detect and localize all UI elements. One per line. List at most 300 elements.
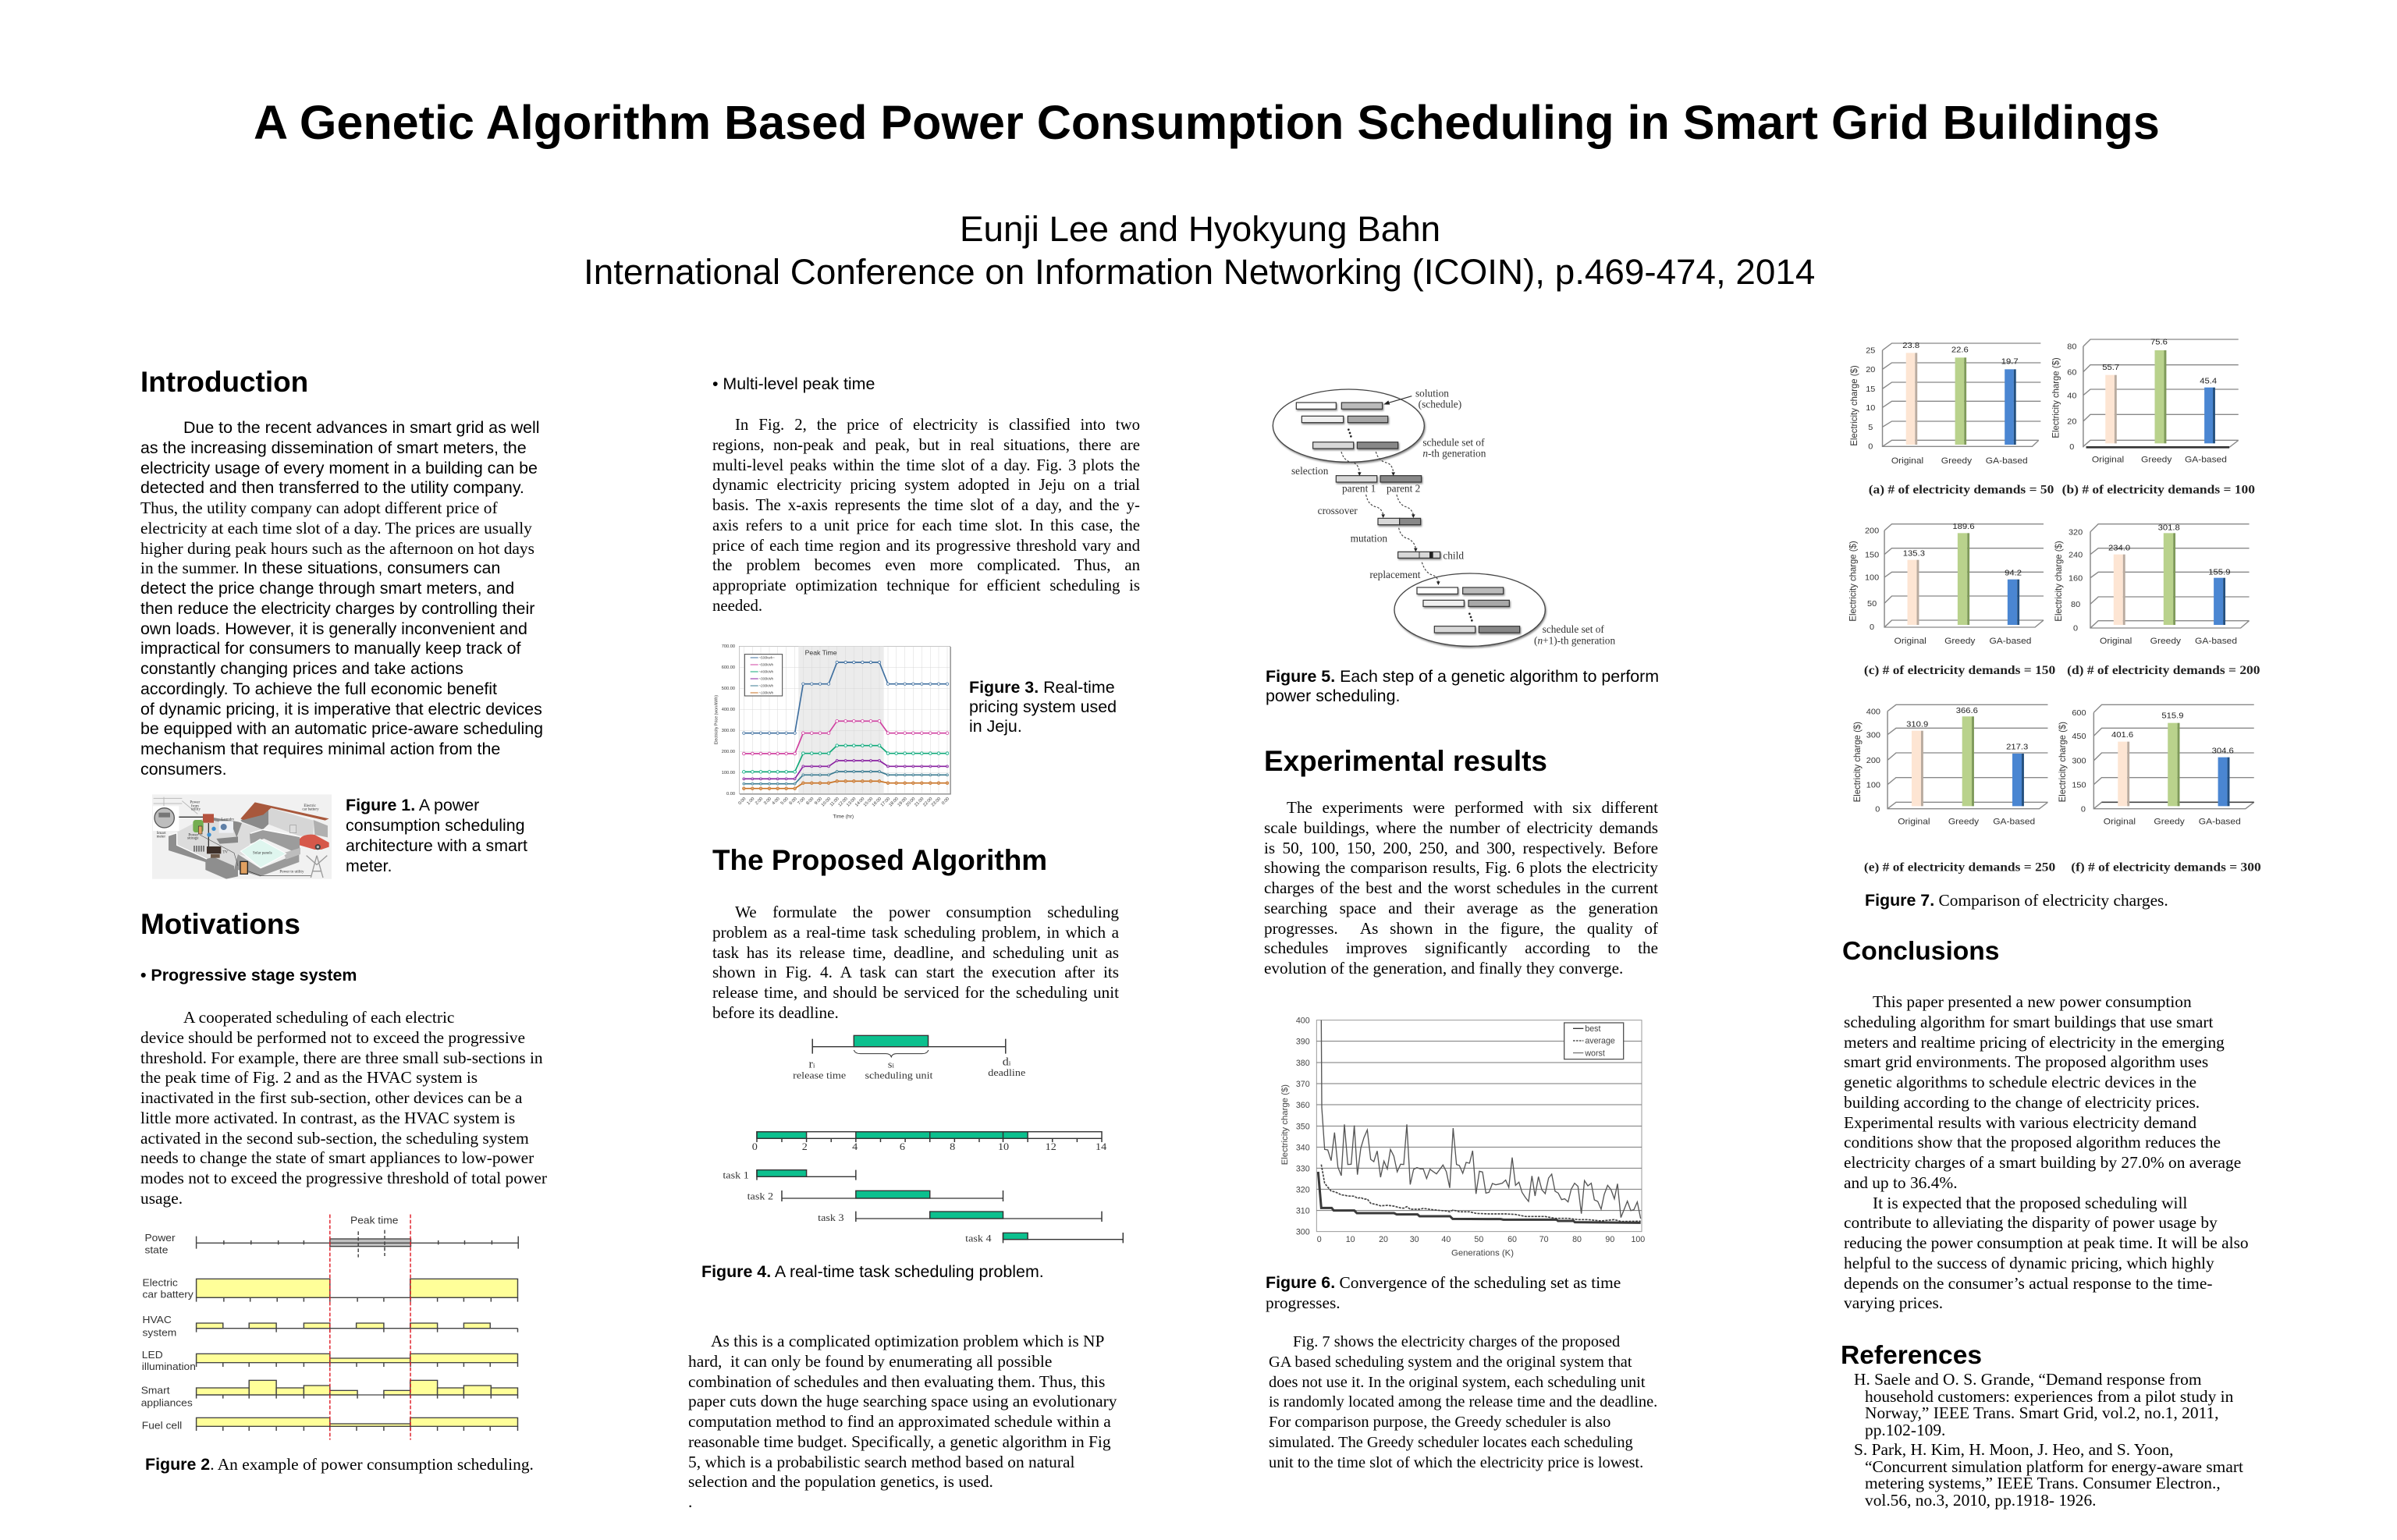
figure 3: real-time pricing line chart: 7:00	[797, 797, 806, 806]
figure 6: convergence line chart: 40	[1441, 1235, 1451, 1244]
figure 6: convergence line chart: 70	[1539, 1235, 1549, 1244]
text block: experimental results: schedules improves significantly according to the	[1264, 939, 1658, 957]
figure 3: real-time pricing line chart: ~100kWh	[759, 691, 774, 695]
bar chart f: 150	[2072, 782, 2086, 790]
text block: introduction: in the summer. In these situations, consumers can	[140, 559, 500, 577]
figure 4: real-time task scheduling diagram: ri	[809, 1058, 815, 1070]
bar chart c: 135.3	[1903, 549, 1925, 558]
figure 1: smart meter architecture illustration: Solar panels	[253, 851, 272, 855]
reference 2: S. Park, H. Kim, H. Moon, J. Heo, and S. Yoon,	[1854, 1440, 2173, 1459]
figure 3: real-time pricing line chart: 15:00	[863, 797, 874, 807]
figure 3: real-time pricing line chart: 400.00	[722, 708, 735, 712]
bar chart f: 304.6	[2212, 747, 2234, 756]
figure 3: real-time pricing line chart: 23:00	[931, 797, 942, 807]
figure 3: real-time pricing line chart	[714, 644, 951, 820]
figure 3: real-time pricing line chart: 11:00	[829, 797, 840, 807]
figure 3: real-time pricing line chart: 14:00	[854, 797, 865, 807]
figure 4: real-time task scheduling diagram: task 4	[965, 1233, 992, 1244]
figure 6: convergence line chart	[1280, 1017, 1645, 1258]
figure 4: real-time task scheduling diagram: task 3	[818, 1212, 844, 1223]
bar chart b: 55.7	[2102, 363, 2119, 372]
figure 2: power consumption schedule chart: state	[144, 1244, 168, 1256]
figure 5: genetic algorithm steps diagram: parent 1	[1342, 483, 1376, 495]
text block: figure 7 explanation: does not use it. In the original system, each scheduling unit	[1269, 1373, 1645, 1390]
figure 6: convergence line chart: 390	[1296, 1038, 1310, 1047]
caption: figure 6: progresses.	[1266, 1293, 1341, 1312]
figure 6: convergence line chart: Generations (K)	[1451, 1249, 1514, 1258]
figure 6: convergence line chart: 80	[1572, 1235, 1582, 1244]
bar chart f: 300	[2072, 758, 2086, 766]
figure 7: electricity charge bar charts	[1847, 338, 2261, 874]
figure 3: real-time pricing line chart: 17:00	[880, 797, 891, 807]
figure 4: real-time task scheduling diagram: 12	[1046, 1141, 1056, 1152]
text block: experimental results: progresses. As shown in the figure, the quality of	[1264, 919, 1658, 938]
bar chart d: Original	[2100, 637, 2132, 646]
bar chart e: 0	[1875, 806, 1880, 814]
text block: experimental results: The experiments were performed with six different	[1287, 798, 1658, 817]
text block: conclusions: and up to 36.4%.	[1844, 1173, 1958, 1192]
figure 2: power consumption schedule chart: illumination	[142, 1361, 196, 1372]
figure 5: genetic algorithm steps diagram: (n+1)-th generation	[1534, 635, 1615, 647]
bar chart c: GA-based	[1989, 637, 2031, 646]
text block: genetic algorithm explanation: hard, it can only be found by enumerating all possible	[688, 1352, 1052, 1371]
figure 6: convergence line chart: 330	[1296, 1164, 1310, 1173]
figure 1: smart meter architecture illustration: utility	[191, 808, 201, 812]
bar chart b: Greedy	[2141, 456, 2172, 464]
caption: figure 4: Figure 4. A real-time task scheduling problem.	[701, 1262, 1044, 1281]
bar chart a: Greedy	[1941, 456, 1972, 466]
bar chart b	[2050, 338, 2255, 496]
figure 4: real-time task scheduling diagram	[723, 1034, 1124, 1244]
text block: proposed algorithm: release time, and should be serviced for the scheduling unit	[712, 983, 1119, 1002]
bar chart b: (b) # of electricity demands = 100	[2062, 482, 2255, 496]
bar chart d: 240	[2069, 552, 2083, 559]
bar chart e: 400	[1866, 708, 1880, 716]
figure 6: convergence line chart: 360	[1296, 1101, 1310, 1110]
figure 6: convergence line chart: 380	[1296, 1059, 1310, 1068]
figure 1: smart meter architecture illustration: Laundry	[221, 818, 235, 822]
figure 3: real-time pricing line chart: 22:00	[922, 797, 933, 807]
bar chart c: Original	[1894, 637, 1926, 646]
figure 3: real-time pricing line chart: ~200kWh	[759, 684, 774, 688]
text block: genetic algorithm explanation: As this is a complicated optimization problem which is NP	[711, 1332, 1104, 1350]
figure 3: real-time pricing line chart: Peak Time	[805, 648, 837, 656]
text block: motivations: little more activated. In contrast, as the HVAC system is	[140, 1109, 515, 1127]
bar chart c: Greedy	[1944, 637, 1976, 646]
text block: experimental results: is 50, 100, 150, 200, 250, and 300, respectively. Before	[1264, 838, 1658, 857]
text block: multi-level peak time: basis. The x-axis represents the time slot of a day, and the y-	[712, 496, 1140, 514]
figure 2: power consumption schedule chart: Electric	[143, 1277, 178, 1288]
bar chart a	[1848, 341, 2054, 496]
text block: conclusions: building according to the change of electricity prices.	[1844, 1093, 2200, 1112]
text block: conclusions: varying prices.	[1844, 1293, 1943, 1312]
bar chart c: 0	[1870, 623, 1874, 632]
text block: conclusions: reducing the power consumption at peak time. It will be also	[1844, 1233, 2249, 1252]
text block: conclusions: helpful to the success of dynamic pricing, which highly	[1844, 1254, 2214, 1272]
bar chart f: 600	[2072, 709, 2086, 718]
text block: experimental results: evolution of the generation, and finally they converge.	[1264, 959, 1623, 978]
bar chart c: Electricity charge ($)	[1847, 541, 1859, 622]
caption: figure 3: in Jeju.	[969, 717, 1022, 736]
bar chart f: 450	[2072, 733, 2086, 741]
bar chart a: 19.7	[2001, 357, 2019, 367]
figure 5: genetic algorithm steps diagram: crossover	[1318, 505, 1358, 516]
text block: multi-level peak time: regions, non-peak and peak, but in real situations, there are	[712, 436, 1140, 454]
bar chart e: Greedy	[1948, 818, 1979, 826]
figure 5: genetic algorithm steps diagram: schedule set of	[1543, 623, 1604, 635]
figure 4: real-time task scheduling diagram: 4	[852, 1141, 858, 1152]
bar chart b: 45.4	[2200, 377, 2217, 385]
figure 2: power consumption schedule chart: system	[143, 1327, 176, 1339]
figure 6: convergence line chart: 350	[1296, 1122, 1310, 1131]
bar chart e: Original	[1898, 818, 1930, 826]
bar chart a: 20	[1866, 366, 1876, 374]
bar chart a: Electricity charge ($)	[1848, 365, 1859, 446]
text block: genetic algorithm explanation: .	[688, 1492, 692, 1511]
bar chart b: 20	[2067, 418, 2077, 427]
text block: motivations: A cooperated scheduling of each electric	[183, 1008, 454, 1027]
caption: figure 7: Figure 7. Comparison of electricity charges.	[1865, 891, 2168, 910]
figure 4: real-time task scheduling diagram: 2	[802, 1141, 808, 1152]
figure 5: genetic algorithm steps diagram: replacement	[1369, 569, 1421, 580]
figure 6: convergence line chart: 10	[1346, 1235, 1355, 1244]
text block: experimental results: scale buildings, where the number of electricity demands	[1264, 818, 1658, 837]
caption: figure 6: Figure 6. Convergence of the scheduling set as time	[1266, 1273, 1621, 1292]
subheading: multi-level peak time: • Multi-level peak time	[712, 374, 875, 393]
text block: introduction: mechanism that requires minimal action from the	[140, 740, 500, 758]
reference 1: H. Saele and O. S. Grande, “Demand response from	[1854, 1370, 2202, 1389]
text block: introduction: electricity at each time slot of a day. The prices are usually	[140, 519, 532, 538]
bar chart a: 10	[1866, 404, 1876, 413]
reference 2	[1854, 1440, 2243, 1509]
figure 1: smart meter architecture illustration: Smart	[157, 832, 166, 836]
bar chart f: Original	[2104, 818, 2136, 826]
text block: genetic algorithm explanation: computation method to find an approximated schedule within a	[688, 1412, 1111, 1431]
caption: figure 1	[346, 796, 527, 875]
bar chart c	[1847, 522, 2055, 677]
figure 2: power consumption schedule chart	[141, 1214, 519, 1440]
text block: introduction: be equipped with an automatic price-aware scheduling	[140, 719, 543, 738]
bar chart e: 300	[1866, 732, 1880, 740]
figure 3: real-time pricing line chart: 0:00	[737, 797, 747, 806]
reference 1: pp.102-109.	[1865, 1420, 1945, 1439]
text block: genetic algorithm explanation: combination of schedules and then evaluating them. Thus, this	[688, 1371, 1105, 1390]
text block: multi-level peak time: In Fig. 2, the price of electricity is classified into two	[735, 416, 1140, 434]
bar chart a: 0	[1868, 443, 1873, 451]
text block: figure 7 explanation	[1269, 1333, 1657, 1471]
bar chart b: Electricity charge ($)	[2050, 357, 2061, 438]
caption: figure 1: consumption scheduling	[346, 816, 525, 835]
figure 5: genetic algorithm steps diagram: (schedule)	[1419, 399, 1461, 410]
bar chart f: (f) # of electricity demands = 300	[2071, 860, 2261, 874]
figure 3: real-time pricing line chart: 20:00	[905, 797, 916, 807]
bar chart d: 320	[2069, 529, 2083, 537]
text block: conclusions: electricity charges of a smart building by 27.0% on average	[1844, 1153, 2241, 1172]
bar chart b: GA-based	[2185, 456, 2227, 464]
text block: introduction: Due to the recent advances in smart grid as well	[183, 418, 540, 437]
text block: multi-level peak time: axis refers to a unit price for each time slot. In this case, the	[712, 516, 1140, 534]
text block: introduction: of dynamic pricing, it is imperative that electric devices	[140, 699, 542, 718]
caption: figure 6	[1266, 1273, 1621, 1312]
figure 6: convergence line chart: 300	[1296, 1228, 1310, 1237]
text block: genetic algorithm explanation: selection and the population genetics, is used.	[688, 1472, 993, 1491]
figure 5: genetic algorithm steps diagram	[1272, 387, 1615, 649]
bar chart f: 0	[2081, 806, 2086, 814]
text block: introduction: own loads. However, it is generally inconvenient and	[140, 619, 527, 638]
figure 6: convergence line chart: 400	[1296, 1017, 1310, 1026]
bar chart d: (d) # of electricity demands = 200	[2067, 663, 2260, 677]
figure 1: smart meter architecture illustration	[152, 794, 332, 879]
caption: figure 1: Figure 1. A power	[346, 796, 479, 814]
bar chart d	[2052, 523, 2260, 677]
figure 4: real-time task scheduling diagram: 14	[1096, 1141, 1106, 1152]
bar chart a: (a) # of electricity demands = 50	[1869, 482, 2054, 496]
bar chart a: Original	[1891, 456, 1923, 466]
figure 3: real-time pricing line chart: 21:00	[914, 797, 925, 807]
figure 4: real-time task scheduling diagram: release time	[793, 1070, 846, 1080]
bar chart f	[2057, 704, 2261, 874]
figure 1: smart meter architecture illustration: Power to utility	[279, 871, 304, 875]
caption: figure 5: Figure 5. Each step of a genetic algorithm to perform	[1266, 667, 1659, 686]
figure 5: genetic algorithm steps diagram: mutation	[1351, 532, 1387, 544]
text block: multi-level peak time	[712, 416, 1140, 615]
bar chart a: 22.6	[1951, 346, 1969, 354]
caption: figure 3: Figure 3. Real-time	[969, 678, 1115, 697]
text: Electricity Price (won/kWh)	[714, 695, 719, 744]
figure 2: power consumption schedule chart: Smart	[141, 1385, 170, 1396]
text block: conclusions: smart grid environments. The proposed algorithm uses	[1844, 1052, 2208, 1071]
figure 5: genetic algorithm steps diagram: selection	[1291, 465, 1329, 477]
figure 3: real-time pricing line chart: 8:00	[805, 797, 815, 806]
reference 2: vol.56, no.3, 2010, pp.1918- 1926.	[1865, 1490, 2096, 1509]
figure 3: real-time pricing line chart: 18:00	[888, 797, 900, 807]
bar chart b: Original	[2092, 456, 2124, 464]
text block: proposed algorithm: problem as a real-time task scheduling problem, in which a	[712, 923, 1119, 942]
figure 6: convergence line chart: 100	[1631, 1235, 1645, 1244]
text block: introduction: electricity usage of every moment in a building can be	[140, 459, 538, 477]
figure 4: real-time task scheduling diagram: si	[888, 1059, 895, 1070]
figure 3: real-time pricing line chart: 4:00	[772, 797, 781, 806]
figure 3: real-time pricing line chart: 0.00	[726, 792, 735, 797]
bar chart c: 150	[1865, 552, 1879, 559]
bar chart b: 40	[2067, 392, 2077, 400]
figure 3: real-time pricing line chart: 2:00	[755, 797, 764, 806]
figure 3: real-time pricing line chart: 1:00	[746, 797, 755, 806]
bar chart e: 217.3	[2006, 743, 2028, 752]
figure 6: convergence line chart: 310	[1296, 1207, 1310, 1216]
figure 1: smart meter architecture illustration: Electric	[304, 804, 317, 808]
text block: conclusions: It is expected that the proposed scheduling will	[1873, 1194, 2187, 1212]
figure 5: genetic algorithm steps diagram: parent 2	[1387, 483, 1420, 495]
figure 3: real-time pricing line chart: 10:00	[821, 797, 832, 807]
bar chart e: 366.6	[1956, 706, 1978, 715]
text block: conclusions: This paper presented a new power consumption	[1873, 992, 2192, 1011]
text block: figure 7 explanation: unit to the time slot of which the electricity price is lowest.	[1269, 1454, 1643, 1471]
bar chart e: (e) # of electricity demands = 250	[1864, 860, 2055, 874]
figure 6: convergence line chart: Electricity charge ($)	[1280, 1084, 1290, 1165]
bar chart c: 200	[1865, 527, 1879, 536]
bar chart a: 25	[1866, 347, 1876, 356]
figure 1: smart meter architecture illustration: meter	[157, 836, 165, 839]
text block: multi-level peak time: needed.	[712, 597, 762, 615]
reference 2: “Concurrent simulation platform for energy-aware smart	[1865, 1457, 2243, 1476]
figure 3: real-time pricing line chart: ~400kWh	[759, 670, 774, 674]
bar chart d: 80	[2071, 601, 2080, 609]
text block: introduction: then reduce the electricity charges by controlling their	[140, 599, 534, 618]
figure 1: smart meter architecture illustration: TV	[222, 850, 228, 854]
conference reference: International Conference on Information Networking (ICOIN), p.469-474, 2014	[584, 252, 1815, 292]
text block: introduction: detected and then transferred to the utility company.	[140, 478, 524, 497]
figure 4: real-time task scheduling diagram: task 1	[723, 1169, 749, 1181]
bar chart d: Greedy	[2150, 637, 2181, 646]
text block: conclusions: Experimental results with various electricity demand	[1844, 1112, 2196, 1131]
bar chart e: 310.9	[1906, 720, 1928, 729]
figure 6: convergence line chart: 320	[1296, 1185, 1310, 1194]
text block: genetic algorithm explanation: 5, which is a probabilistic search method based on natural	[688, 1453, 1074, 1471]
figure 3: real-time pricing line chart: 9:00	[814, 797, 823, 806]
text block: conclusions: depends on the consumer’s actual response to the time-	[1844, 1273, 2212, 1292]
bar chart d: 301.8	[2158, 523, 2180, 533]
figure 3: real-time pricing line chart: ~500kWh	[759, 663, 774, 667]
bar chart f: Greedy	[2154, 818, 2185, 826]
figure 3: real-time pricing line chart: 700.00	[722, 644, 735, 649]
figure 4: real-time task scheduling diagram: 10	[998, 1141, 1009, 1152]
text block: introduction	[140, 418, 543, 779]
figure 2: power consumption schedule chart: appliances	[141, 1397, 193, 1408]
figure 3: real-time pricing line chart: 12:00	[837, 797, 849, 807]
caption: figure 5	[1266, 667, 1659, 705]
text block: figure 7 explanation: GA based scheduling system and the original system that	[1269, 1354, 1632, 1371]
bar chart f: 515.9	[2161, 711, 2184, 721]
subheading: progressive stage system: • Progressive stage system	[140, 966, 357, 985]
text block: motivations	[140, 1008, 547, 1208]
bar chart b: 60	[2067, 369, 2077, 377]
figure 3: real-time pricing line chart: 6:00	[789, 797, 798, 806]
figure 1: smart meter architecture illustration: car battery	[302, 807, 319, 811]
text block: motivations: the peak time of Fig. 2 and as the HVAC system is	[140, 1068, 478, 1087]
text block: proposed algorithm: We formulate the power consumption scheduling	[735, 903, 1119, 921]
text block: conclusions	[1844, 992, 2249, 1312]
reference 2: metering systems,” IEEE Trans. Consumer Electron.,	[1865, 1474, 2221, 1492]
figure 4: real-time task scheduling diagram: di	[1003, 1056, 1011, 1068]
bar chart a: 15	[1866, 385, 1876, 394]
authors: Eunji Lee and Hyokyung Bahn	[960, 209, 1440, 249]
figure 4: real-time task scheduling diagram: 6	[900, 1141, 905, 1152]
bar chart e	[1851, 704, 2055, 874]
text block: conclusions: scheduling algorithm for smart buildings that use smart	[1844, 1013, 2213, 1031]
text block: introduction: accordingly. To achieve the full economic benefit	[140, 680, 497, 698]
figure 2: power consumption schedule chart: Peak time	[350, 1215, 398, 1226]
text block: motivations: needs to change the state of smart appliances to low-power	[140, 1148, 534, 1167]
text block: conclusions: contribute to alleviating the disparity of power usage by	[1844, 1213, 2218, 1232]
bar chart f: 401.6	[2111, 730, 2133, 740]
text block: conclusions: meters and realtime pricing of electricity in the emerging	[1844, 1033, 2225, 1052]
figure 6: convergence line chart: worst	[1584, 1049, 1605, 1058]
figure 6: convergence line chart: 20	[1379, 1235, 1388, 1244]
figure 6: convergence line chart: 50	[1474, 1235, 1483, 1244]
bar chart a: 5	[1868, 424, 1873, 432]
figure 3: real-time pricing line chart: 5:00	[780, 797, 790, 806]
figure 6: convergence line chart: 90	[1605, 1235, 1614, 1244]
text block: multi-level peak time: dynamic electricity pricing system adopted in Jeju on a trial	[712, 476, 1140, 494]
figure 3: real-time pricing line chart: ~500kwh~	[759, 656, 775, 660]
figure 2: power consumption schedule chart: car battery	[143, 1289, 194, 1300]
caption: figure 3	[969, 678, 1117, 736]
bar chart d: Electricity charge ($)	[2052, 541, 2064, 622]
caption: figure 1: architecture with a smart	[346, 836, 527, 855]
text block: multi-level peak time: price of each time region and its progressive threshold vary and	[712, 537, 1140, 554]
figure 3: real-time pricing line chart: 300.00	[722, 729, 735, 733]
figure 2: power consumption schedule chart: Fuel cell	[142, 1420, 182, 1432]
text block: experimental results: searching space and their average as the generation	[1264, 899, 1658, 917]
figure 6: convergence line chart: best	[1585, 1024, 1601, 1034]
figure 3: real-time pricing line chart: 19:00	[897, 797, 908, 807]
text block: figure 7 explanation: is randomly located among the release time and the deadline.	[1269, 1393, 1657, 1410]
bar chart b: 0	[2069, 443, 2075, 452]
bar chart e: 100	[1866, 782, 1880, 790]
text block: motivations: usage.	[140, 1189, 183, 1208]
figure 3: real-time pricing line chart: 13:00	[846, 797, 857, 807]
figure 5: genetic algorithm steps diagram: n-th generation	[1422, 448, 1486, 460]
caption: figure 1: meter.	[346, 857, 392, 875]
figure 5: genetic algorithm steps diagram: solution	[1415, 387, 1449, 399]
text block: motivations: modes not to exceed the progressive threshold of total power	[140, 1169, 547, 1187]
text block: experimental results	[1264, 798, 1658, 978]
text block: introduction: as the increasing dissemination of smart meters, the	[140, 438, 527, 457]
figure 6: convergence line chart: 60	[1507, 1235, 1517, 1244]
bar chart c: (c) # of electricity demands = 150	[1864, 663, 2055, 677]
bar chart c: 94.2	[2005, 569, 2022, 577]
reference 1: household customers: experiences from a pilot study in	[1865, 1387, 2233, 1406]
bar chart e: Electricity charge ($)	[1851, 722, 1863, 802]
figure 4: real-time task scheduling diagram: scheduling unit	[865, 1070, 933, 1080]
heading: conclusions: Conclusions	[1842, 937, 1999, 966]
figure 6: convergence line chart: 370	[1296, 1080, 1310, 1089]
text block: introduction: impractical for consumers to manually keep track of	[140, 639, 520, 658]
title: A Genetic Algorithm Based Power Consumption Scheduling in Smart Grid Buildings	[254, 96, 2160, 149]
figure 1: smart meter architecture illustration: Power	[190, 801, 200, 805]
text block: proposed algorithm	[712, 903, 1119, 1022]
text block: multi-level peak time: appropriate optimization technique for efficient scheduling is	[712, 577, 1140, 594]
figure 3: real-time pricing line chart: 100.00	[722, 771, 735, 775]
figure 4: real-time task scheduling diagram: task 2	[748, 1190, 773, 1202]
figure 3: real-time pricing line chart: 500.00	[722, 687, 735, 691]
figure 3: real-time pricing line chart: ~300kWh	[759, 677, 774, 681]
figure 5: genetic algorithm steps diagram: schedule set of	[1422, 437, 1485, 449]
text block: introduction: detect the price change through smart meters, and	[140, 579, 514, 598]
heading: references: References	[1841, 1341, 1982, 1370]
figure 1: smart meter architecture illustration: storage	[187, 837, 199, 841]
heading: motivations: Motivations	[140, 908, 300, 940]
text block: genetic algorithm explanation	[688, 1332, 1117, 1511]
bar chart d: 160	[2069, 575, 2083, 583]
text block: introduction: Thus, the utility company can adopt different price of	[140, 499, 498, 517]
bar chart d: 155.9	[2208, 568, 2230, 577]
bar chart f: GA-based	[2199, 818, 2241, 826]
text block: experimental results: showing the comparison results, Fig. 6 plots the electricity	[1264, 858, 1658, 877]
figure 3: real-time pricing line chart: 600.00	[722, 665, 735, 670]
figure 6: convergence line chart: average	[1585, 1037, 1615, 1046]
text block: introduction: constantly changing prices and take actions	[140, 659, 463, 678]
figure 2: power consumption schedule chart: HVAC	[143, 1315, 172, 1325]
bar chart b: 75.6	[2150, 338, 2168, 346]
bar chart f: Electricity charge ($)	[2057, 722, 2068, 802]
bar chart d: 0	[2073, 625, 2078, 633]
figure 6: convergence line chart: 0	[1317, 1235, 1322, 1244]
text block: proposed algorithm: task has its release time, deadline, and scheduling unit as	[712, 942, 1119, 961]
text block: figure 7 explanation: simulated. The Greedy scheduler locates each scheduling	[1269, 1434, 1633, 1451]
figure 2: power consumption schedule chart: LED	[142, 1350, 163, 1361]
